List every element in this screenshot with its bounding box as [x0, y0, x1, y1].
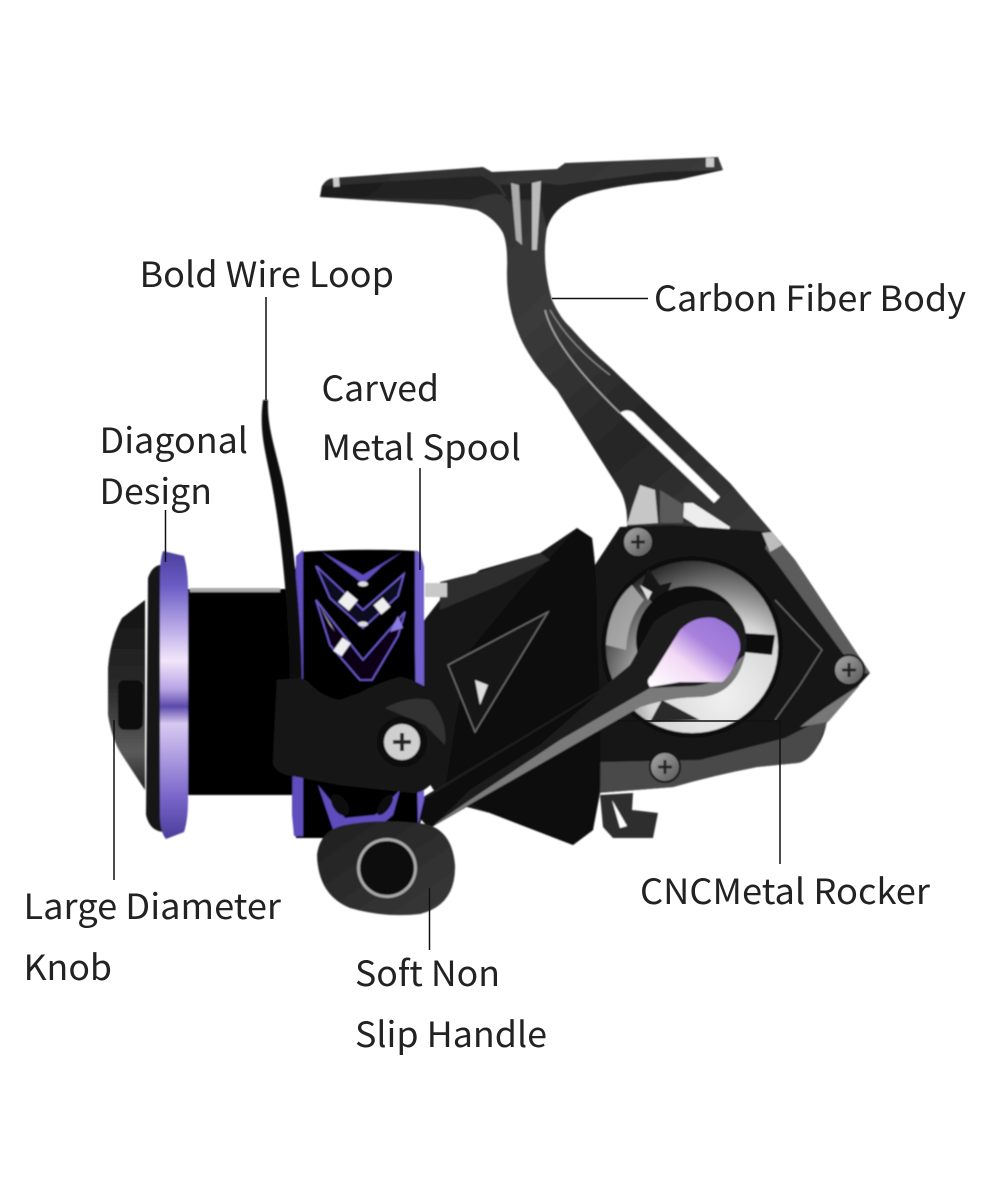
label: Carved Metal Spool: Carved: [322, 361, 439, 412]
label: Carved Metal Spool: [322, 361, 521, 471]
carved metal spool: [292, 550, 424, 838]
label: Large Diameter Knob: [24, 879, 281, 991]
screw: [377, 717, 427, 767]
CNC metal rocker handle: [410, 601, 746, 829]
label: Carbon Fiber Body: Carbon Fiber Body: [654, 271, 966, 322]
spool body: [185, 589, 300, 795]
label: Diagonal Design: Design: [100, 464, 212, 515]
label: Bold Wire Loop: Bold Wire Loop: [140, 247, 394, 298]
illustration: spinning fishing reel: [108, 157, 870, 915]
soft non slip handle knob: [317, 821, 455, 915]
carbon fiber body arm and foot: [320, 157, 772, 552]
leader lines: [114, 297, 780, 950]
diagonal design purple flange: [160, 551, 188, 839]
label: Carved Metal Spool: Metal Spool: [322, 420, 521, 471]
label: Large Diameter Knob: Knob: [24, 940, 112, 991]
label: Diagonal Design: [100, 413, 248, 515]
spool front flange and knob: [108, 551, 300, 839]
label: Soft Non Slip Handle: [355, 946, 547, 1058]
label: CNCMetal Rocker: CNCMetal Rocker: [640, 864, 930, 915]
label: Soft Non Slip Handle: Soft Non: [355, 946, 500, 997]
bail arm with screw: [273, 677, 453, 793]
bold wire loop: [262, 400, 302, 682]
large diameter knob: [108, 600, 145, 790]
rotor mid arm with triangular cut: [425, 528, 601, 845]
label: Large Diameter Knob: Large Diameter: [24, 879, 281, 930]
label: Diagonal Design: Diagonal: [100, 413, 248, 464]
rotor disc: [601, 556, 783, 738]
rear body housing: [370, 525, 870, 845]
label: Soft Non Slip Handle: Slip Handle: [355, 1007, 547, 1058]
body screws: [623, 527, 864, 782]
